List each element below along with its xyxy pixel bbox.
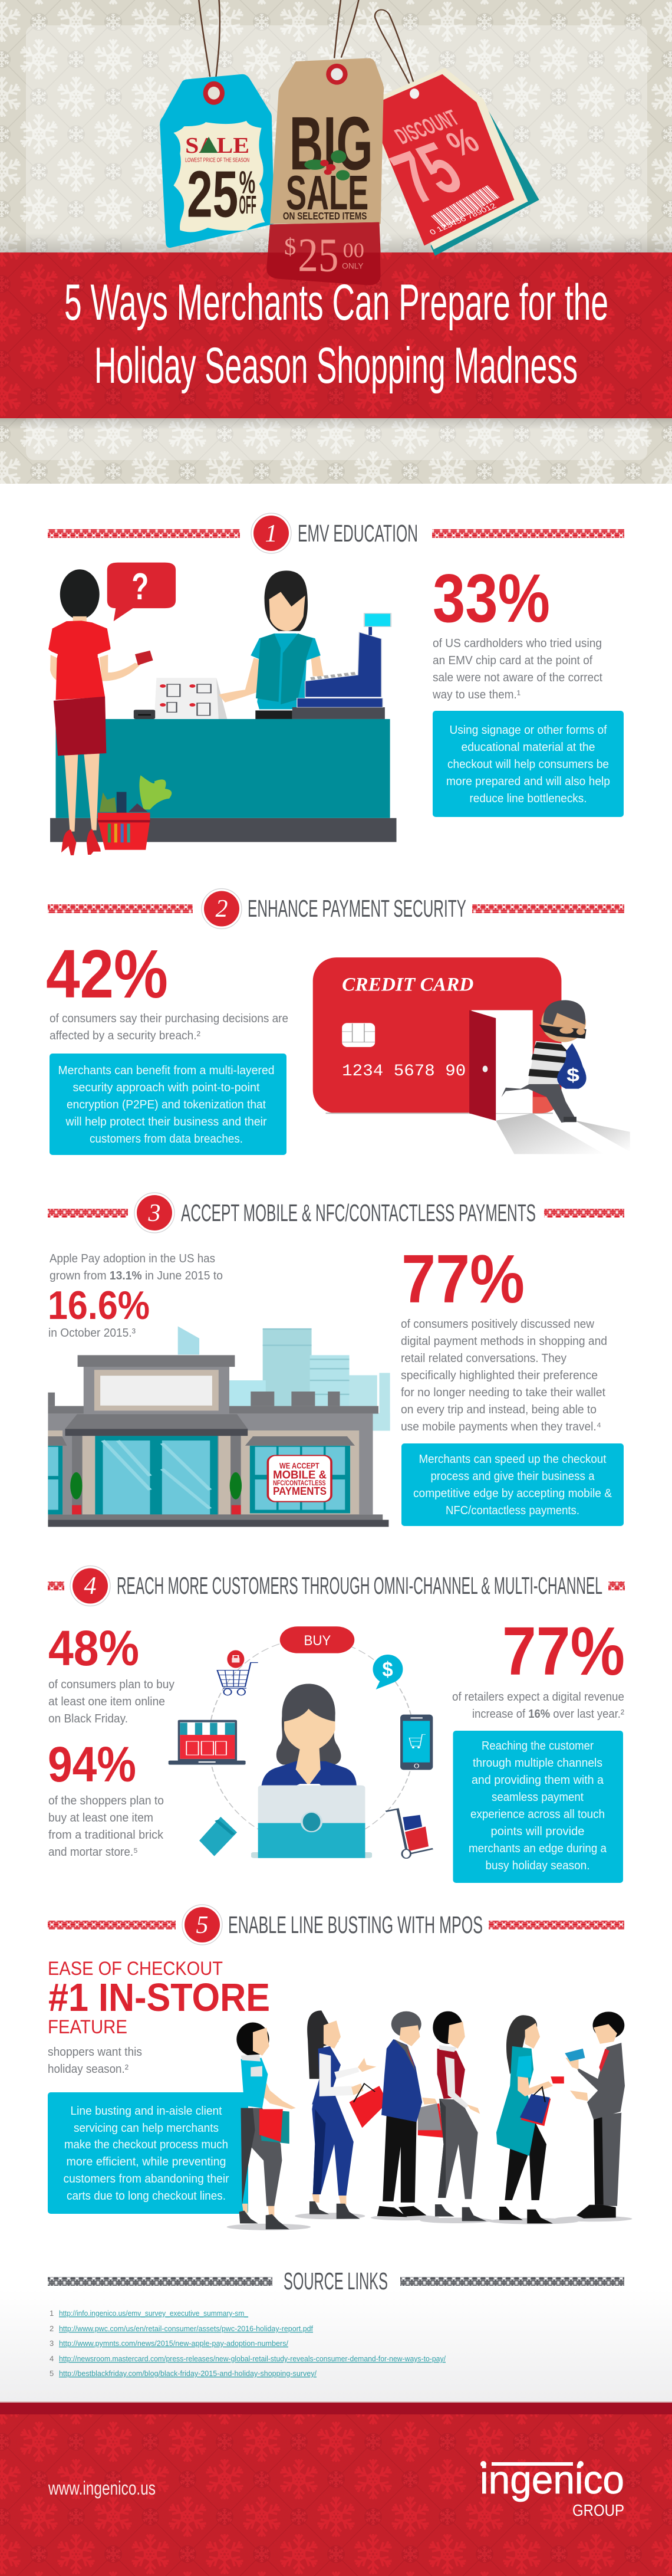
text block: 94% description: buy at least one item [48,1812,153,1824]
text block: shoppers want: holiday season.² [48,2063,129,2076]
text block: 77% description: of consumers positively discussed new [401,1318,595,1331]
section heading [48,888,624,928]
lighter inner panel [26,25,647,460]
ingenico group logo: GROUP [572,2501,624,2519]
thief: $ [566,1065,579,1085]
text block: 33% description: an EMV chip card at the point of [433,654,592,667]
window [250,1446,350,1513]
section heading: 3 [147,1200,160,1227]
callout: layered security [50,1054,286,1155]
red discount tag: DISCOUNT [390,105,463,149]
snowflake red background [0,2414,672,2576]
section heading: ENABLE LINE BUSTING WITH MPOS [228,1911,483,1938]
red discount tag [374,68,539,256]
blue tag: 25 [187,157,238,231]
list of links: http://newsroom.mastercard.com/press-releases/new-global-retail-study-reveals-consumer-demand-for-new-ways-to-pay/ [59,2354,446,2363]
text block: retailers: increase of 16% over last year.² [472,1708,624,1721]
text block: 33% description: way to use them.¹ [432,688,521,701]
credit card: 1234 5678 90 [342,1062,466,1081]
icon: laptop store [169,1720,246,1765]
section heading [48,513,624,553]
list of links: http://info.ingenico.us/emv_survey_executive_summary-sm_ [59,2309,249,2318]
thief [502,1000,587,1123]
card terminal [134,710,155,719]
cashier [219,570,324,719]
icon: teal card [199,1817,237,1856]
callout: multiple channels: experience across all touch [470,1808,605,1821]
panel: section 3 mobile and contactless [48,1193,624,1527]
text block: 77% description: retail related conversations. They [401,1352,566,1365]
callout: line busting: carts due to long checkout lines. [67,2190,226,2203]
callout: line busting [48,2092,248,2214]
text block: 77% description: use mobile payments when they travel.⁴ [401,1420,601,1433]
brown big sale tag: $ [284,234,296,260]
door [95,1436,218,1514]
woman at laptop [261,1684,357,1786]
list of links: 4 [50,2354,54,2363]
stat: 42%: 42% [46,936,168,1012]
panel: source links [0,2267,672,2402]
icon: lock badge [227,1650,244,1668]
text block: 42% description: of consumers say their purchasing decisions are [50,1012,288,1025]
heading [48,2267,624,2295]
text block: retailers: of retailers expect a digital revenue [452,1691,624,1704]
heading: SOURCE LINKS [284,2267,388,2295]
shopper 1 [236,2023,296,2229]
shopper 4 [433,2011,486,2221]
text block: shoppers want: shoppers want this [48,2046,142,2059]
website url: www.ingenico.us [48,2477,156,2499]
section heading: 2 [216,895,228,923]
footer top line [0,2401,672,2403]
panel: section 4 omni-channel [48,1566,625,1883]
shopper 2 [307,2010,388,2219]
red discount tag: 75 [378,127,476,219]
stat: 94%: 94% [48,1737,136,1792]
laptop [251,1785,372,1858]
city skyline [178,1326,390,1430]
stat: 48%: 48% [48,1620,139,1676]
list of links: http://www.pwc.com/us/en/retail-consumer/assets/pwc-2016-holiday-report.pdf [59,2324,313,2333]
section heading: 4 [84,1573,97,1600]
callout: multiple channels: through multiple channels [473,1757,602,1770]
callout: layered security: will help protect their business and their [65,1115,267,1128]
panel: hero header [0,0,672,484]
panel: footer [0,2401,672,2576]
band bottom shadow [0,418,672,430]
callout: speed up checkout: process and give their business a [430,1470,595,1483]
section heading: 5 [196,1912,209,1939]
section heading [48,1193,624,1233]
red discount tag: % [439,120,486,164]
text block: 48% description: on Black Friday. [48,1712,128,1725]
text block: 48% description [48,1678,174,1725]
callout: multiple channels: Reaching the customer [482,1740,594,1753]
callout: multiple channels: points will provide [490,1825,585,1838]
illustration: checkout counter [48,563,397,855]
window sign: MOBILE & [273,1469,327,1481]
store building [48,1355,378,1514]
callout: line busting: make the checkout process much [64,2138,228,2151]
buy button: BUY [304,1633,331,1648]
list of links: 5 [50,2369,54,2378]
panel: section 2 payment security [46,888,630,1155]
text block: 33% description: of US cardholders who tried using [433,637,602,650]
shopper 5 [496,2015,564,2223]
text block: 77% description: specifically highlighted their preference [401,1369,598,1382]
section heading [48,1905,624,1945]
floor shadows [227,2213,632,2230]
list of links: http://www.pymnts.com/news/2015/new-apple-pay-adoption-numbers/ [59,2339,288,2348]
text block: Apple Pay adoption: Apple Pay adoption in the US has [50,1252,215,1265]
window sign: PAYMENTS [273,1485,327,1497]
store base [48,1514,388,1527]
callout: line busting: Line busting and in-aisle client [71,2105,222,2118]
illustration: omni-channel circle [169,1626,433,1858]
awnings [48,1414,355,1446]
text block: 33% description: sale were not aware of the correct [433,671,602,684]
red discount tag: 0 123456 789012 [427,201,498,237]
callout: signage [433,711,624,817]
section heading: 1 [265,520,277,547]
text block: Apple Pay adoption [50,1252,223,1282]
light beams [496,1113,630,1154]
text block: 48% description: of consumers plan to buy [48,1678,174,1691]
list of links: http://bestblackfriday.com/blog/black-friday-2015-and-holiday-shopping-survey/ [59,2369,317,2378]
text block: 94% description [48,1794,164,1859]
callout: layered security: customers from data breaches. [90,1133,243,1146]
callout: line busting: customers from abandoning their [64,2173,229,2186]
stat: 16.6%: 16.6% [48,1283,150,1328]
section heading [48,1566,625,1606]
section heading: EMV EDUCATION [298,520,418,547]
illustration: checkout line of people [227,2010,632,2230]
icon: phone [400,1715,433,1770]
text block: 94% description: from a traditional brick [48,1829,164,1842]
blue tag: OFF [239,191,256,219]
callout: multiple channels [453,1731,623,1883]
text block: shoppers want [48,2046,142,2076]
brown big sale tag: ON SELECTED ITEMS [283,211,367,222]
panel: section 1 EMV education [48,513,624,855]
icon: price tags [160,0,539,286]
text block: 42% description: affected by a security breach.² [50,1029,200,1042]
brown big sale tag: BIG [289,101,373,186]
list of links: 3 [50,2339,54,2348]
icon: shopping cart [218,1662,258,1695]
icon: dollar bubble [373,1655,403,1689]
list of links: 2 [50,2324,54,2333]
shopper 3 [377,2011,443,2217]
text: in October 2015: in October 2015.³ [48,1327,136,1340]
callout: layered security: encryption (P2PE) and tokenization that [67,1098,266,1111]
customer [48,569,153,855]
blue tag: LOWEST PRICE OF THE SEASON [185,157,249,163]
callout: signage: educational material at the [461,741,595,754]
band top shadow [0,233,672,252]
blue tag [160,74,274,248]
instruction sign [154,678,227,719]
brown big sale tag [266,58,384,286]
brown big sale tag: ONLY [342,261,364,271]
blue tag: % [239,164,255,200]
callout: multiple channels: and providing them with a [472,1774,604,1787]
callout: line busting: more efficient, while preventing [66,2155,226,2168]
callout: speed up checkout: competitive edge by accepting mobile & [413,1487,612,1500]
window sign: WE ACCEPT [279,1461,319,1471]
callout: signage: more prepared and will also help [446,775,610,788]
callout: multiple channels: seamless payment [492,1791,584,1804]
callout: multiple channels: busy holiday season. [486,1859,589,1872]
red title band [0,252,672,418]
credit card: CREDIT CARD [342,973,473,995]
shopping basket [98,775,172,850]
cashier with card reader [565,2011,625,2219]
tag strings [199,0,417,91]
gradient background [0,2289,672,2402]
panel: section 5 line busting [48,1905,632,2230]
text block: 33% description [432,637,602,701]
stat: #1 in-store feature: EASE OF CHECKOUT [48,1958,223,1979]
counter [50,719,397,842]
callout: layered security: Merchants can benefit from a multi-layered [58,1064,275,1077]
text block: Apple Pay adoption: grown from 13.1% in June 2015 to [50,1269,223,1282]
stat: #1 in-store feature [48,1958,270,2037]
blue tag: SALE [185,133,249,158]
callout: speed up checkout [401,1443,624,1526]
potted plants [70,1472,242,1514]
text block: 77% description: on every trip and instead, being able to [401,1403,597,1416]
title [64,274,608,394]
callout: layered security: security approach with point-to-point [73,1081,260,1094]
stat: 33%: 33% [433,560,550,636]
speech bubble [107,563,176,621]
brown big sale tag: 25 [298,228,338,281]
illustration: storefront [48,1326,390,1527]
callout: speed up checkout: NFC/contactless payments. [446,1504,579,1517]
window sign [268,1455,331,1502]
callout: speed up checkout: Merchants can speed up the checkout [419,1453,607,1466]
snowflake background [0,0,672,484]
text block: 77% description [401,1318,607,1433]
text block: 94% description: of the shoppers plan to [48,1794,164,1807]
door [469,1010,561,1121]
text block: 48% description: at least one item online [48,1695,165,1708]
cash register [292,613,391,719]
icon: dollar bubble: $ [383,1658,393,1681]
section heading: ENHANCE PAYMENT SECURITY [248,895,466,922]
list of links: 1 [50,2309,54,2318]
speech bubble: ? [131,565,149,608]
credit card [313,957,561,1113]
callout: signage: reduce line bottlenecks. [469,792,587,805]
stat: #1 in-store feature: FEATURE [48,2016,127,2037]
buy button [280,1626,354,1653]
text block: 94% description: and mortar store.⁵ [48,1846,138,1859]
callout: signage: checkout will help consumers be [447,758,609,771]
callout: line busting: servicing can help merchants [74,2122,219,2135]
stat: #1 in-store feature: #1 IN-STORE [48,1976,270,2020]
list of links [50,2309,446,2378]
text block: retailers [452,1691,624,1721]
dashed ring [209,1639,414,1844]
brown big sale tag: SALE [286,165,368,220]
callout: multiple channels: merchants an edge during a [469,1842,607,1855]
stat: 77%: 77% [401,1241,525,1317]
dark red strip [0,2403,672,2414]
text block: 77% description: digital payment methods in shopping and [401,1335,607,1348]
stat: right 77%: 77% [502,1613,625,1689]
illustration: credit card and thief [313,957,630,1154]
callout: signage: Using signage or other forms of [449,724,607,737]
text block: 42% description [50,1012,288,1042]
text block: 77% description: for no longer needing to take their wallet [401,1386,605,1399]
illustration: storefront: NFC/CONTACTLESS [273,1479,326,1487]
icon: hand truck [386,1809,433,1858]
brown big sale tag: 00 [343,239,364,262]
ingenico group logo: ingenico [480,2457,624,2502]
